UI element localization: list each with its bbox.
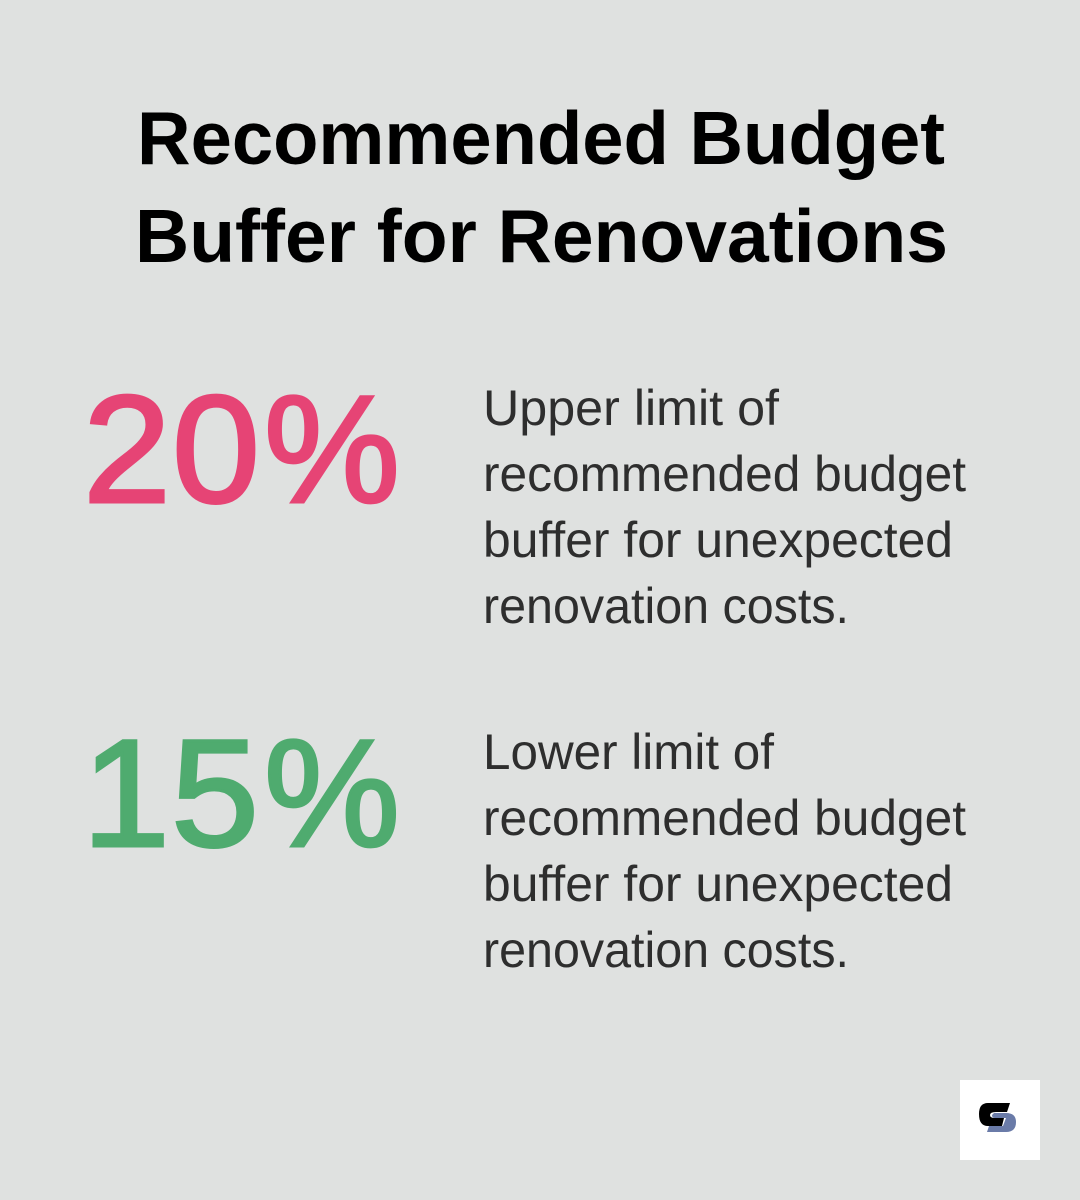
stat: 15%: 5 [171, 708, 259, 879]
stat: 15%: % [264, 708, 400, 879]
stat: 20%: 2 [83, 364, 171, 535]
text block: lower limit: Lower limit of [483, 724, 774, 780]
text block: lower limit [483, 724, 966, 978]
title [135, 96, 948, 278]
text block: upper limit: renovation costs. [483, 578, 849, 634]
logo [960, 1080, 1040, 1160]
text block: upper limit: recommended budget [483, 446, 966, 502]
text block: lower limit: buffer for unexpected [483, 856, 953, 912]
title: Recommended Budget [137, 96, 945, 180]
text block: upper limit: buffer for unexpected [483, 512, 953, 568]
stat: 20%: 0 [172, 364, 260, 535]
title: Buffer for Renovations [135, 194, 948, 278]
text block: upper limit [483, 380, 966, 634]
text block: upper limit: Upper limit of [483, 380, 779, 436]
text block: lower limit: recommended budget [483, 790, 966, 846]
text block: lower limit: renovation costs. [483, 922, 849, 978]
stat: 20%: % [264, 364, 400, 535]
stat: 15%: 1 [82, 708, 170, 879]
